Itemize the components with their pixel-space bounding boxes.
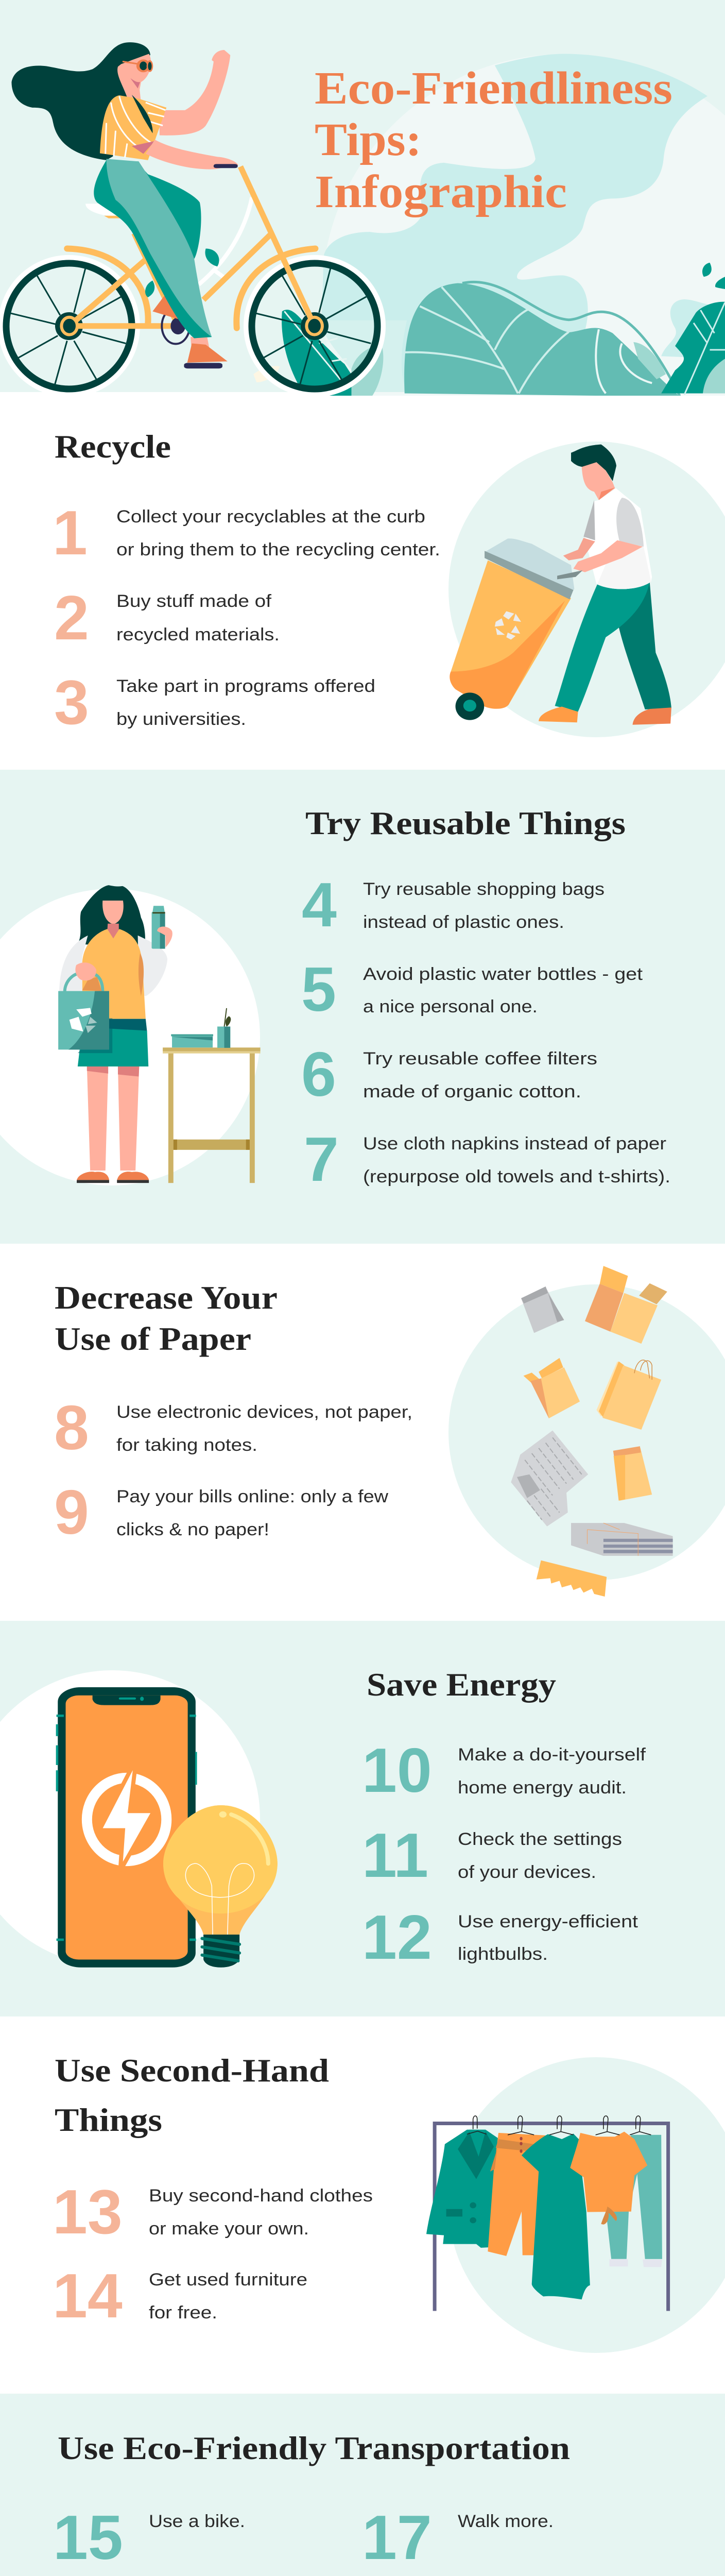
circle backdrop: [0, 1670, 260, 1966]
grey bag: [521, 1286, 564, 1333]
illustration: phone and bulb: [56, 1687, 278, 1968]
bicycle: [1, 166, 383, 395]
handle: [214, 164, 238, 168]
tip 10: 10: [362, 1735, 432, 1805]
tip 6: Try reusable coffee filters: [363, 1049, 597, 1069]
orange top: [570, 2132, 647, 2225]
illustration: clothes rack: [426, 2116, 668, 2311]
hangers: [467, 2116, 651, 2135]
tip 11: Check the settings: [458, 1829, 622, 1849]
newspaper: [511, 1431, 588, 1527]
leg skin: [191, 337, 211, 353]
tip 13: Buy second-hand clothes: [149, 2186, 373, 2206]
tip 5: [301, 954, 643, 1024]
tip 12: 12: [362, 1902, 432, 1972]
tip 12: [362, 1902, 638, 1972]
woman cyclist: [11, 42, 238, 368]
tip 8: 8: [54, 1393, 89, 1463]
heading: Use of Paper: [55, 1320, 251, 1357]
tip 9: Pay your bills online: only a few: [116, 1487, 388, 1506]
table: [163, 1008, 261, 1183]
sleeves: [616, 498, 644, 547]
tip 15: Use a bike.: [149, 2512, 245, 2531]
orange trousers: [488, 2133, 546, 2256]
tip 2: 2: [54, 583, 89, 653]
title: Eco-Friendliness: [315, 63, 672, 114]
tip 17: Walk more.: [458, 2512, 554, 2531]
tip 9: 9: [54, 1477, 89, 1547]
shirt: [585, 488, 652, 589]
tip 6: [301, 1039, 597, 1109]
tip 5: Avoid plastic water bottles - get: [363, 964, 643, 984]
rack: [435, 2124, 668, 2311]
panel: transportation: [0, 2394, 725, 2576]
heading: Things: [55, 2102, 162, 2138]
legs: [87, 1066, 139, 1171]
teal dress: [522, 2133, 590, 2299]
face: [102, 901, 124, 924]
hair: [11, 42, 153, 160]
illustration: paper items: [511, 1266, 673, 1597]
shoes: [539, 706, 578, 722]
tip 15: [53, 2502, 245, 2572]
title: [315, 63, 672, 217]
tip 4: Try reusable shopping bags: [363, 879, 605, 899]
tip 14: 14: [53, 2261, 123, 2331]
tip 14: for free.: [149, 2303, 217, 2323]
tip 8: for taking notes.: [116, 1435, 257, 1455]
heading: Use Eco-Friendly Transportation: [58, 2430, 570, 2466]
head: [582, 462, 615, 500]
reusable bag: [58, 962, 112, 1053]
tip 11: [362, 1820, 622, 1890]
light bulb: [163, 1805, 278, 1968]
tip 1: [53, 498, 440, 568]
tip 6: made of organic cotton.: [363, 1082, 581, 1101]
small box: [524, 1358, 580, 1418]
small leaf behind wheel: [253, 310, 383, 396]
panel: save energy: [0, 1621, 725, 2016]
tip 2: Buy stuff made of: [116, 591, 272, 611]
leaves small: [145, 248, 219, 297]
tip 3: [54, 667, 375, 737]
title: Tips:: [315, 114, 422, 165]
tip 9: clicks & no paper!: [116, 1520, 269, 1539]
heading: Decrease Your: [55, 1279, 278, 1316]
tip 12: lightbulbs.: [458, 1944, 548, 1964]
tip 13: or make your own.: [149, 2219, 309, 2239]
paper bag: [613, 1446, 652, 1501]
panel: header: [0, 0, 725, 396]
tip 1: Collect your recyclables at the curb: [116, 507, 425, 527]
circle backdrop: [448, 1284, 725, 1580]
bin: [450, 561, 571, 708]
frame: [61, 166, 322, 344]
right leaf: [661, 263, 725, 395]
tip 8: [54, 1393, 412, 1463]
tip 1: 1: [53, 498, 88, 568]
title: Infographic: [315, 166, 567, 217]
big leaf: [404, 282, 680, 397]
tip 2: recycled materials.: [116, 625, 280, 645]
tip 2: [54, 583, 280, 653]
wheel left: [1, 258, 137, 395]
hair: [571, 445, 616, 481]
front leg: [555, 582, 650, 712]
heading: Try Reusable Things: [305, 805, 626, 841]
skirt: [82, 1019, 147, 1031]
panel: recycle: [53, 428, 725, 737]
bundled stack: [571, 1523, 673, 1556]
tip 17: 17: [362, 2502, 432, 2572]
tip 8: Use electronic devices, not paper,: [116, 1402, 412, 1422]
arms: [563, 538, 595, 561]
back shoe: [152, 296, 178, 319]
jacket: [59, 936, 167, 996]
heading: Use Second-Hand: [55, 2052, 329, 2089]
blazer: [426, 2130, 504, 2248]
power bolt icon: [87, 1768, 166, 1871]
tip 13: [53, 2177, 373, 2247]
tip 7: 7: [304, 1124, 339, 1194]
heading: [55, 1279, 278, 1357]
heading: Recycle: [55, 428, 171, 465]
open box: [585, 1266, 667, 1344]
tip 11: 11: [362, 1820, 428, 1890]
raised arm: [160, 50, 230, 135]
bottle and hand: [152, 906, 172, 949]
shoes: [77, 1172, 149, 1180]
face: [117, 54, 151, 103]
heading: [55, 2052, 329, 2138]
trousers: [606, 2135, 662, 2267]
bin wheel: [456, 692, 484, 720]
tip 7: (repurpose old towels and t-shirts).: [363, 1167, 670, 1187]
sunglasses: [123, 59, 153, 72]
tip 7: Use cloth napkins instead of paper: [363, 1134, 666, 1154]
tip 3: 3: [54, 667, 89, 737]
tip 4: [302, 870, 605, 940]
tip 4: instead of plastic ones.: [363, 912, 564, 932]
tip 5: a nice personal one.: [363, 997, 538, 1016]
panel: decrease paper: [54, 1266, 725, 1597]
seat: [85, 204, 123, 216]
shirt: [100, 95, 166, 160]
globe background: [319, 54, 725, 538]
tip 11: of your devices.: [458, 1862, 596, 1882]
tip 13: 13: [53, 2177, 123, 2247]
shirt: [82, 929, 146, 1019]
tip 1: or bring them to the recycling center.: [116, 540, 440, 560]
circle backdrop: [448, 442, 725, 737]
heading: Save Energy: [367, 1666, 556, 1703]
egg carton: [537, 1561, 607, 1597]
back leg: [619, 582, 671, 709]
shoe: [187, 344, 228, 363]
shopping bag: [596, 1360, 661, 1430]
tip 10: [362, 1735, 646, 1805]
tip 15: 15: [53, 2502, 123, 2572]
tip 10: home energy audit.: [458, 1778, 627, 1798]
tip 14: [53, 2261, 307, 2331]
illustration: woman with reusable bag: [58, 885, 261, 1183]
pants: [139, 164, 201, 259]
phone: [56, 1687, 197, 1968]
tip 14: Get used furniture: [149, 2270, 307, 2290]
recycle mark: [495, 611, 521, 639]
tip 12: Use energy-efficient: [458, 1912, 638, 1931]
tip 5: 5: [301, 954, 336, 1024]
circle backdrop: [0, 889, 260, 1185]
tip 17: [362, 2502, 554, 2572]
illustration: man with recycling bin: [450, 445, 671, 725]
tip 6: 6: [301, 1039, 336, 1109]
panel: second-hand: [53, 2052, 725, 2353]
tip 4: 4: [302, 870, 337, 940]
tip 7: [304, 1124, 670, 1194]
tip 10: Make a do-it-yourself: [458, 1745, 646, 1765]
tip 3: by universities.: [116, 709, 246, 729]
wheel right: [246, 258, 383, 395]
tip 3: Take part in programs offered: [116, 676, 375, 696]
tip 9: [54, 1477, 388, 1547]
panel: reusable things: [0, 770, 725, 1244]
hair: [78, 885, 145, 946]
lid: [485, 538, 574, 598]
lower arm: [146, 140, 238, 170]
circle backdrop: [448, 2057, 725, 2353]
